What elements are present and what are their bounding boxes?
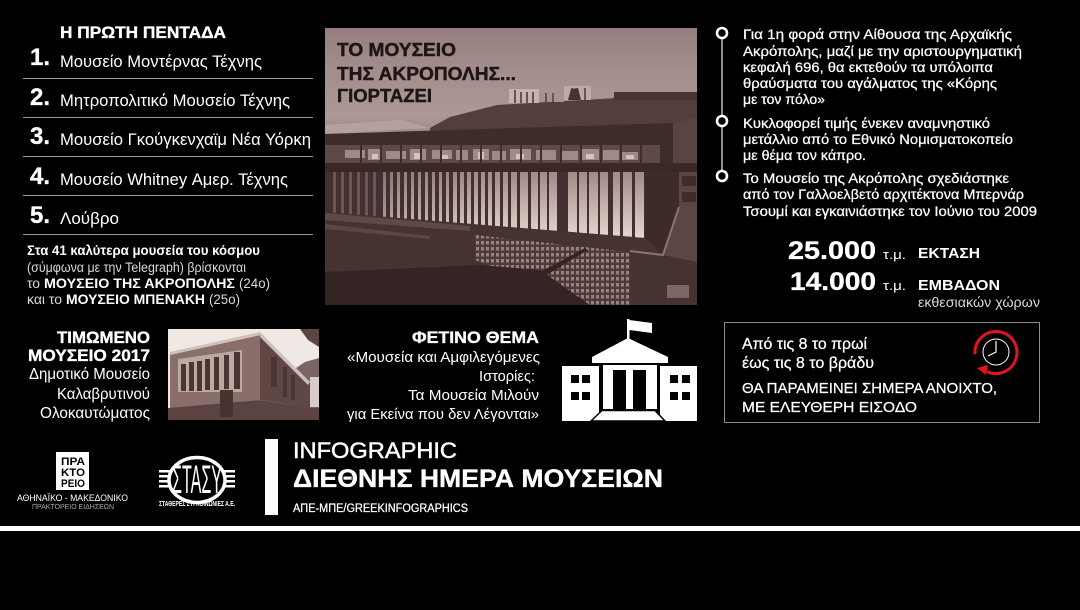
list item 2 bbox=[30, 84, 290, 111]
list item 5 bbox=[30, 202, 119, 229]
figure: site area: 25.000 bbox=[788, 237, 876, 265]
list item 1: 1. bbox=[30, 44, 50, 71]
text block: awarded museum: Δημοτικό Μουσείο bbox=[29, 366, 150, 383]
logo: STASY: ΣΤΑΣΥ bbox=[172, 458, 222, 502]
fact 1 bbox=[717, 27, 1022, 107]
fact 3: Το Μουσείο της Ακρόπολης σχεδιάστηκε bbox=[743, 171, 1009, 186]
list item 5: Λούβρο bbox=[60, 209, 119, 228]
figure: exhibition area: εκθεσιακών χώρων bbox=[918, 294, 1040, 310]
icon: museum building bbox=[562, 319, 697, 421]
list item 2: Μητροπολιτικό Μουσείο Τέχνης bbox=[60, 91, 290, 110]
text block: awarded museum: Ολοκαυτώματος bbox=[40, 405, 150, 422]
logo: Athens-Macedonian News Agency bbox=[17, 452, 128, 511]
text block: Telegraph ranking: και το bbox=[27, 292, 62, 307]
callout: opening hours: Από τις 8 το πρωί bbox=[742, 336, 868, 353]
figure: exhibition area: ΕΜΒΑΔΟΝ bbox=[918, 278, 1000, 294]
figure: site area bbox=[788, 237, 980, 265]
figure: site area: ΕΚΤΑΣΗ bbox=[918, 246, 980, 262]
logo: Athens-Macedonian News Agency: ΠΡΑΚΤΟΡΕΙΟ ΕΙΔΗΣΕΩΝ bbox=[32, 502, 114, 511]
panel: awarded museum 2017 bbox=[28, 329, 319, 422]
logo: STASY: ΣΤΑΘΕΡΕΣ ΣΥΓΚΟΙΝΩΝΙΕΣ Α.Ε. bbox=[159, 499, 235, 508]
Parthenon ruins bbox=[509, 86, 591, 103]
text block: Telegraph ranking: ΜΟΥΣΕΙΟ ΤΗΣ ΑΚΡΟΠΟΛΗΣ bbox=[44, 276, 235, 291]
list item 5: 5. bbox=[30, 202, 50, 229]
panel: timeline facts bbox=[717, 27, 1037, 219]
footer title block: ΑΠΕ-ΜΠΕ/GREEKINFOGRAPHICS bbox=[293, 503, 468, 515]
figure: exhibition area: τ.μ. bbox=[883, 278, 906, 293]
logo: Athens-Macedonian News Agency: ΑΘΗΝΑΪΚΟ - ΜΑΚΕΔΟΝΙΚΟ bbox=[17, 493, 128, 504]
text block: theme: για Εκείνα που δεν Λέγονται» bbox=[347, 406, 539, 423]
fact 1: κεφαλή 696, θα εκτεθούν τα υπόλοιπα bbox=[743, 60, 993, 75]
text block: theme: ΦΕΤΙΝΟ ΘΕΜΑ bbox=[412, 328, 539, 347]
figure: exhibition area: 14.000 bbox=[790, 268, 876, 296]
text block: awarded museum: ΜΟΥΣΕΙΟ 2017 bbox=[28, 347, 150, 365]
fact 1: με τον πόλο» bbox=[743, 92, 825, 107]
list item 1: Μουσείο Μοντέρνας Τέχνης bbox=[60, 52, 262, 71]
photo title: ΤΗΣ ΑΚΡΟΠΟΛΗΣ... bbox=[337, 64, 516, 84]
callout: opening hours: ΜΕ ΕΛΕΥΘΕΡΗ ΕΙΣΟΔΟ bbox=[742, 399, 917, 416]
fact 1: θραύσματα του αγάλματος της «Κόρης bbox=[743, 76, 998, 91]
fact 1: Ακρόπολης, μαζί με την αριστουργηματική bbox=[743, 44, 1022, 59]
fact 3: Τσουμί και εγκαινιάστηκε τον Ιούνιο του 2009 bbox=[743, 204, 1037, 219]
main glass facade bbox=[325, 172, 645, 238]
list item 4 bbox=[30, 163, 288, 190]
callout: opening hours: ΘΑ ΠΑΡΑΜΕΙΝΕΙ ΣΗΜΕΡΑ ΑΝΟΙΧΤΟ, bbox=[742, 380, 997, 397]
text block: Telegraph ranking: (24ο) bbox=[239, 276, 270, 291]
fact 1: Για 1η φορά στην Αίθουσα της Αρχαϊκής bbox=[743, 27, 1013, 42]
panel: this year's theme bbox=[347, 319, 697, 423]
figure: site area: τ.μ. bbox=[883, 247, 906, 262]
lower level bbox=[325, 212, 697, 305]
footer title block: INFOGRAPHIC bbox=[293, 438, 457, 463]
logo: STASY bbox=[159, 458, 235, 508]
text block: theme bbox=[347, 328, 540, 423]
callout: opening hours bbox=[724, 322, 1040, 422]
logo: Athens-Macedonian News Agency: ΡΕΙΟ bbox=[61, 478, 85, 490]
text block: Telegraph ranking: Στα 41 καλύτερα μουσεία του κόσμου bbox=[27, 243, 260, 258]
list item 4: Μουσείο Whitney Αμερ. Τέχνης bbox=[60, 170, 288, 189]
fact 2: Κυκλοφορεί τιμής ένεκεν αναμνηστικό bbox=[743, 116, 990, 131]
panel: Acropolis Museum photo bbox=[325, 28, 697, 305]
fact 3 bbox=[717, 171, 1037, 219]
text block: Telegraph ranking: ΜΟΥΣΕΙΟ ΜΠΕΝΑΚΗ bbox=[66, 292, 205, 307]
photo: Kalavryta museum bbox=[168, 329, 319, 420]
photo title: ΤΟ ΜΟΥΣΕΙΟ bbox=[337, 40, 456, 60]
logo: Athens-Macedonian News Agency: ΠΡΑ bbox=[61, 456, 85, 468]
list item 4: 4. bbox=[30, 163, 50, 190]
text block: Telegraph ranking: (σύμφωνα με την Telegraph) βρίσκονται bbox=[27, 260, 246, 275]
list item 1 bbox=[30, 44, 262, 71]
list item 2: 2. bbox=[30, 84, 50, 111]
footer title block bbox=[265, 438, 663, 515]
text block: awarded museum: ΤΙΜΩΜΕΝΟ bbox=[57, 329, 150, 347]
fact 2: με θέμα τον κάπρο. bbox=[743, 148, 866, 163]
text block: Telegraph ranking bbox=[27, 243, 270, 307]
panel: top five museums bbox=[23, 24, 313, 307]
figure: exhibition area bbox=[790, 268, 1040, 310]
fact 2 bbox=[717, 116, 1013, 163]
list item 3 bbox=[30, 123, 311, 150]
callout: opening hours: έως τις 8 το βράδυ bbox=[742, 355, 874, 372]
fact 3: από τον Γαλλοελβετό αρχιτέκτονα Μπερνάρ bbox=[743, 187, 1024, 202]
text block: theme: Ιστορίες: bbox=[479, 368, 535, 385]
building upper floor bbox=[325, 123, 673, 163]
list item 3: 3. bbox=[30, 123, 50, 150]
logo: Athens-Macedonian News Agency: ΚΤΟ bbox=[61, 467, 85, 479]
text block: Telegraph ranking: (25ο) bbox=[209, 292, 240, 307]
footer title block: ΔΙΕΘΝΗΣ ΗΜΕΡΑ ΜΟΥΣΕΙΩΝ bbox=[293, 465, 663, 493]
panel: key figures bbox=[788, 237, 1040, 310]
text block: awarded museum: Καλαβρυτινού bbox=[57, 386, 150, 403]
text block: awarded museum bbox=[28, 329, 150, 422]
photo title: ΓΙΟΡΤΑΖΕΙ bbox=[337, 86, 432, 106]
list item 3: Μουσείο Γκούγκενχαϊμ Νέα Υόρκη bbox=[60, 130, 311, 149]
icon: clock with red arrow bbox=[975, 332, 1017, 375]
photo title bbox=[337, 40, 516, 106]
right side of building bbox=[649, 172, 697, 262]
text block: theme: «Μουσεία και Αμφιλεγόμενες bbox=[347, 349, 540, 366]
Acropolis hill bbox=[430, 98, 697, 131]
text block: theme: Τα Μουσεία Μιλούν bbox=[408, 387, 539, 404]
text block: Telegraph ranking: το bbox=[27, 276, 40, 291]
fact 2: μετάλλιο από το Εθνικό Νομισματοκοπείο bbox=[743, 132, 1013, 147]
heading: top five: Η ΠΡΩΤΗ ΠΕΝΤΑΔΑ bbox=[60, 24, 226, 42]
